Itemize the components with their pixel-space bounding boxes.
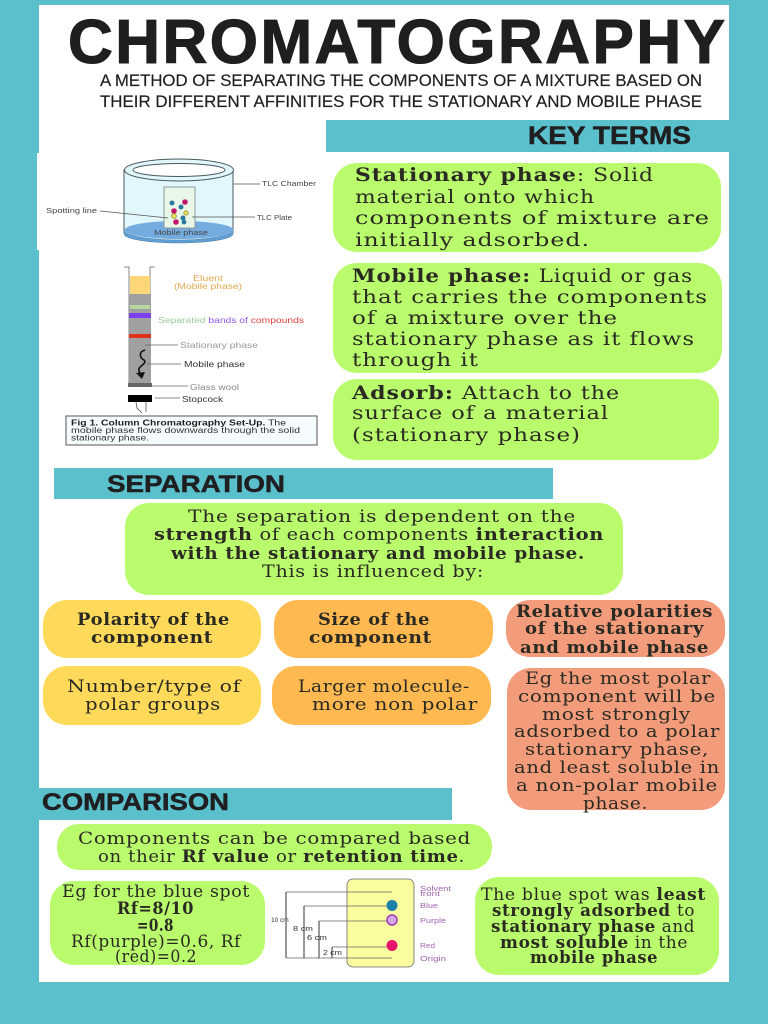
panel: separation intro: The separation is dependent on the [188,506,576,526]
subtitle: A METHOD OF SEPARATING THE COMPONENTS OF A MIXTURE BASED ON [100,71,702,90]
card: larger molecule: more non polar [312,694,478,714]
TLC plate Rf diagram: Purple [420,916,446,925]
heading bar: comparison: COMPARISON [42,789,229,816]
card: polarity example: adsorbed to a polar [514,721,720,741]
TLC plate Rf diagram: Origin [420,954,446,963]
card: polarity example: a non-polar mobile [516,775,718,795]
card: polarity of the component: component [91,627,213,647]
panel: Rf calculation: Rf(purple)=0.6, Rf [71,931,242,951]
card: polarity of the component: Polarity of the [77,609,230,629]
panel: mobile phase definition [333,263,722,373]
card: polarity example: most strongly [542,704,691,724]
panel: mobile phase definition: through it [352,350,479,371]
card: size of the component: Size of the [318,609,430,629]
TLC chamber diagram: Mobile phase [154,228,208,237]
figure caption box: stationary phase. [71,434,149,442]
figure caption box: Fig 1. Column Chromatography Set-Up. The [71,418,287,428]
panel: stationary phase definition: initially adsorbed. [355,230,590,251]
panel: blue spot conclusion: stationary phase and [491,916,695,936]
panel: stationary phase definition [333,163,721,252]
card: polarity example: Eg the most polar [525,668,711,688]
panel: comparison intro [57,824,492,870]
panel: separation intro: This is influenced by: [262,561,484,581]
panel: separation intro [125,503,623,595]
TLC plate Rf diagram: 2 cm [323,948,342,957]
card: number and type of polar groups: Number/type of [67,676,242,696]
panel: mobile phase definition: of a mixture over the [352,308,618,329]
subtitle: THEIR DIFFERENT AFFINITIES FOR THE STATIONARY AND MOBILE PHASE [100,92,702,111]
panel: mobile phase definition: that carries the components [352,287,708,308]
panel: separation intro: with the stationary and mobile phase. [170,543,585,563]
panel: mobile phase definition: Mobile phase: Liquid or gas [352,266,693,287]
column chromatography diagram: Eluent [193,274,224,283]
TLC chamber diagram: TLC Plate [257,213,292,222]
figure caption box: mobile phase flows downwards through the solid [71,426,300,435]
panel: mobile phase definition: stationary phase as it flows [352,329,695,350]
card: number and type of polar groups [43,666,261,725]
TLC plate Rf diagram: Red [420,941,435,950]
TLC plate Rf diagram [271,879,452,967]
panel: adsorb definition: Adsorb: Attach to the [351,383,620,404]
card: relative polarities [506,600,725,657]
column chromatography diagram: (Mobile phase) [174,282,242,291]
TLC plate Rf diagram: Solvent [420,884,452,893]
figure caption box [66,416,317,445]
heading bar: separation [54,468,553,499]
panel: Rf calculation: (red)=0.2 [115,946,197,966]
card: relative polarities: of the stationary [525,618,705,638]
TLC chamber diagram: Spotting line [46,206,97,215]
TLC plate Rf diagram: front [420,889,441,898]
heading bar: separation: SEPARATION [107,471,285,498]
panel: adsorb definition: (stationary phase) [352,425,581,446]
panel: comparison intro: on their Rf value or retention time . [98,846,465,866]
panel: Rf calculation: Rf=8/10 [117,898,194,918]
panel: blue spot conclusion: mobile phase [530,947,658,967]
heading bar: comparison [39,788,452,820]
card: size of the component: component [309,627,432,647]
card: larger molecule: Larger molecule- [298,676,470,696]
TLC plate Rf diagram: 8 cm [293,924,313,933]
panel: adsorb definition: surface of a material [352,403,609,424]
column chromatography diagram: Separated bands of compounds [158,316,304,325]
card: polarity of the component [43,600,261,658]
panel: blue spot conclusion [475,877,719,975]
panel: stationary phase definition: components of mixture are [355,208,710,229]
column chromatography diagram: Stopcock [182,395,224,404]
card: relative polarities: and mobile phase [520,637,709,657]
heading bar: key terms [326,120,768,152]
card: size of the component [274,600,493,658]
card: polarity example: stationary phase, [525,739,709,759]
title: CHROMATOGRAPHY [68,8,725,77]
card: number and type of polar groups: polar groups [85,694,221,714]
TLC chamber diagram: TLC Chamber [262,179,317,188]
panel: Rf calculation [50,881,265,966]
card: polarity example [507,668,725,813]
panel: stationary phase definition: Stationary phase : Solid [355,165,654,186]
card: larger molecule [272,666,491,725]
card: relative polarities: Relative polarities [516,601,713,621]
column chromatography diagram: Stationary phase [180,341,259,350]
column chromatography diagram [124,267,304,413]
panel: comparison intro: Components can be compared based [78,828,471,848]
panel: blue spot conclusion: strongly adsorbed to [492,900,695,920]
subtitle [100,71,702,111]
card: polarity example: phase. [583,793,648,813]
column chromatography diagram: Mobile phase [184,360,246,369]
panel: Rf calculation: Eg for the blue spot [62,881,250,901]
heading bar: key terms: KEY TERMS [528,122,691,150]
panel: blue spot conclusion: The blue spot was least [481,884,706,904]
card: polarity example: component will be [518,686,716,706]
panel: blue spot conclusion: most soluble in the [500,932,688,952]
TLC plate Rf diagram: Blue [420,901,438,910]
TLC plate Rf diagram: 10 cm [271,917,289,924]
TLC chamber diagram [37,153,326,250]
TLC plate Rf diagram: 6 cm [307,933,327,942]
panel: separation intro: strength of each components interaction [154,524,604,544]
card: polarity example: and least soluble in [514,757,720,777]
panel: adsorb definition [333,379,719,460]
column chromatography diagram: Glass wool [190,383,239,392]
panel: stationary phase definition: material onto which [355,187,595,208]
panel: Rf calculation: =0.8 [137,915,174,935]
